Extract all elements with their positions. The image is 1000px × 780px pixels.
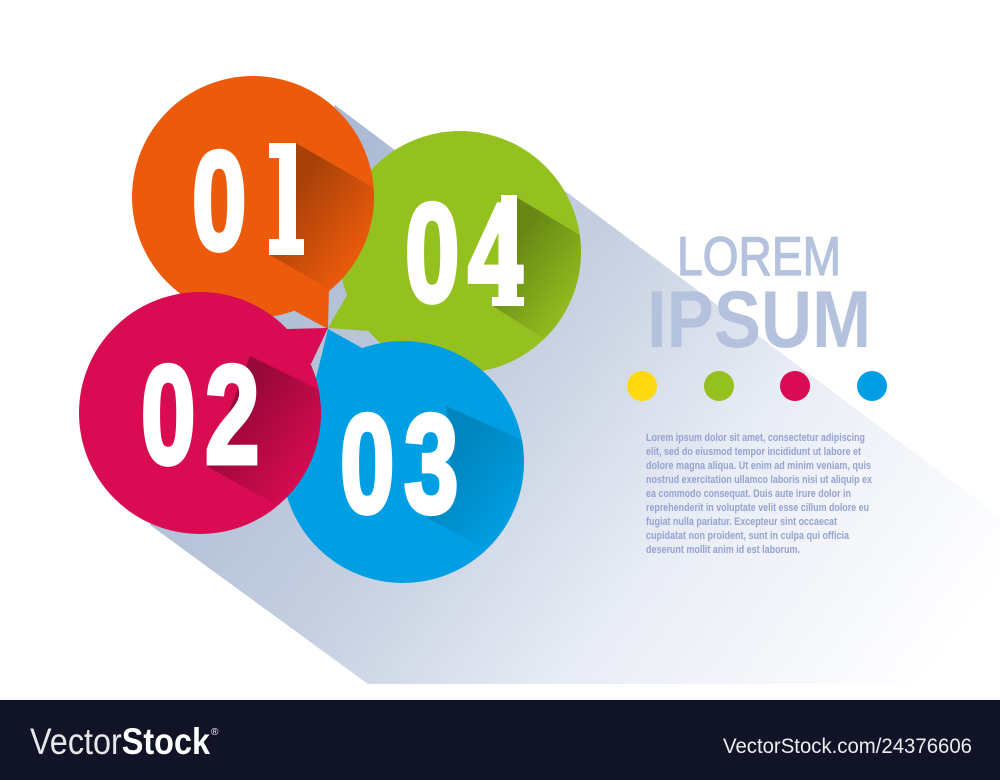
bubble 03: blue: 3 xyxy=(404,386,459,542)
footer bar: ® xyxy=(211,727,219,738)
body text: ea commodo consequat. Duis aute irure dolor in xyxy=(646,488,851,500)
bubble 01: orange: 1 xyxy=(257,123,312,279)
heading: IPSUM xyxy=(647,275,871,365)
body text: nostrud exercitation ullamco laboris nisi ut aliquip ex xyxy=(646,474,873,486)
bubble 01: orange xyxy=(132,76,374,329)
body text xyxy=(646,432,873,556)
body text: cupidatat non proident, sunt in culpa qui officia xyxy=(646,530,850,542)
footer logo: VectorStock xyxy=(30,721,210,762)
body text: elit, sed do eiusmod tempor incididunt ut labore et xyxy=(646,446,861,458)
body text: dolore magna aliqua. Ut enim ad minim veniam, quis xyxy=(646,460,871,472)
bubble 04: green: 0 xyxy=(405,175,460,331)
footer url: VectorStock.com/24376606 xyxy=(723,735,972,758)
bubble 02: red: 0 xyxy=(141,337,196,493)
bubble 02: red xyxy=(79,292,340,540)
heading xyxy=(647,225,871,365)
colour dots xyxy=(627,371,887,401)
bubble 02: red: 2 xyxy=(205,337,260,493)
heading: LOREM xyxy=(677,225,841,287)
body text: reprehenderit in voluptate velit esse cillum dolore eu xyxy=(646,502,869,514)
long diagonal shadow xyxy=(150,105,1000,684)
body text: fugiat nulla pariatur. Excepteur sint occaecat xyxy=(646,516,837,528)
footer bar xyxy=(0,700,1000,780)
bubble 03: blue xyxy=(282,329,540,583)
body text: deserunt mollit anim id est laborum. xyxy=(646,544,800,556)
bubble 04: green: 4 xyxy=(468,175,523,331)
bubble 04: green xyxy=(328,131,600,375)
body text: Lorem ipsum dolor sit amet, consectetur adipiscing xyxy=(646,432,865,444)
bubble 03: blue: 0 xyxy=(340,386,395,542)
bubble 01: orange: 0 xyxy=(192,123,247,279)
